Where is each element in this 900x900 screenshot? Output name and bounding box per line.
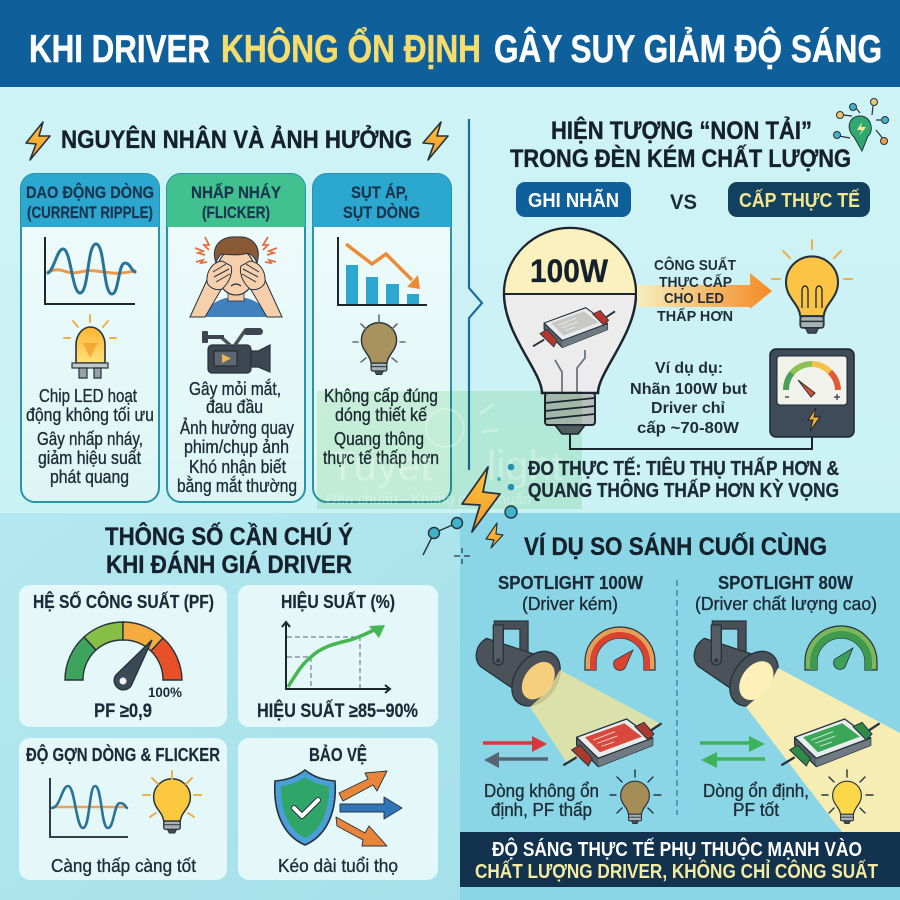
icon: LED chip	[64, 315, 116, 378]
text: real power lower: CÔNG SUẤT	[654, 256, 736, 274]
wire from bulb to meter	[570, 432, 812, 449]
watermark: Tuyet	[330, 442, 432, 489]
panel: voltage and current drop: Không cấp đúng	[324, 386, 438, 406]
current arrows unstable	[483, 736, 548, 768]
title banner	[0, 0, 900, 87]
text: real power lower: THỰC CẤP	[659, 274, 732, 291]
text: example: Ví dụ dụ:	[655, 360, 723, 377]
heading: under-load phenomenon: TRONG ĐÈN KÉM CHẤT LƯỢNG	[510, 144, 851, 173]
heading: final comparison: VÍ DỤ SO SÁNH CUỐI CÙNG	[524, 531, 827, 561]
driver red	[563, 719, 662, 767]
big 100W bulb	[504, 228, 636, 434]
spotlight with bright lens	[694, 625, 788, 715]
panel: flicker: Khó nhận biết	[189, 457, 286, 477]
panel: current ripple: DAO ĐỘNG DÒNG	[26, 183, 154, 202]
card: ripple and flicker	[19, 738, 227, 880]
text: example	[630, 360, 748, 437]
VS text: VS	[670, 191, 697, 214]
text: real power lower: THẤP HƠN	[657, 308, 733, 325]
efficiency curve chart	[282, 622, 390, 693]
title banner: KHÔNG ỔN ĐỊNH	[221, 26, 481, 71]
icon: driver inside bulb	[533, 308, 615, 347]
panel: flicker: Ảnh hưởng quay	[180, 417, 294, 438]
heading: parameters: THÔNG SỐ CẦN CHÚ Ý	[105, 521, 353, 551]
icon: person covering eyes	[190, 237, 282, 317]
green gauge	[805, 626, 877, 670]
panel: spotlight 80W: SPOTLIGHT 80W	[718, 573, 853, 593]
icon: power meter	[770, 349, 854, 437]
heading: causes and effects: NGUYÊN NHÂN VÀ ẢNH HƯỞNG	[61, 124, 412, 154]
actual supply pill	[728, 182, 870, 217]
text: real power lower: CHO LED	[664, 290, 724, 307]
gauge	[65, 622, 182, 690]
label pill: GHI NHÃN	[528, 189, 619, 212]
panel: spotlight 100W: Dòng không ổn	[484, 781, 599, 801]
panel: flicker: bằng mắt thường	[177, 475, 297, 496]
panel: flicker: NHẤP NHÁY	[191, 183, 282, 202]
watermark	[317, 391, 582, 509]
big 100W bulb: 100W	[530, 253, 609, 289]
current arrows stable	[700, 736, 765, 768]
panel: current ripple	[21, 174, 159, 502]
label pill	[516, 182, 631, 217]
watermark: Đèn chuẩn - Không gian chuẩn	[326, 491, 531, 508]
card: power factor: 100%	[148, 684, 183, 700]
card: protection: Kéo dài tuổi thọ	[278, 856, 398, 876]
panel: current ripple: (CURRENT RIPPLE)	[27, 203, 153, 222]
card: efficiency: HIỆU SUẤT ≥85−90%	[257, 700, 418, 722]
small ripple chart	[50, 778, 128, 837]
icon: bright bulb small	[822, 770, 873, 824]
section divider with notch	[469, 119, 482, 470]
icon: dim bulb small	[610, 770, 661, 824]
panel: voltage and current drop: Quang thông	[334, 429, 424, 449]
panel: spotlight 100W	[476, 573, 662, 824]
bullet list: real measurement: ĐO THỰC TẾ: TIÊU THỤ THẤP HƠN &	[528, 456, 839, 480]
heading: under-load phenomenon	[510, 115, 851, 173]
panel: flicker	[167, 174, 305, 502]
heading: parameters	[105, 521, 353, 579]
text: example: Driver chỉ	[651, 400, 726, 417]
falling bar chart	[338, 237, 427, 305]
arrows	[336, 771, 402, 846]
panel: spotlight 80W: (Driver chất lượng cao)	[695, 594, 877, 614]
watermark: light	[487, 442, 563, 489]
panel: voltage and current drop: SỤT ÁP,	[351, 183, 408, 202]
heading: parameters: KHI ĐÁNH GIÁ DRIVER	[106, 550, 352, 579]
heading: under-load phenomenon: HIỆN TƯỢNG “NON TẢI”	[551, 115, 812, 145]
card: efficiency	[238, 585, 438, 727]
panel: voltage and current drop	[313, 174, 451, 502]
panel: current ripple: phát quang	[50, 467, 129, 487]
lower-right background	[460, 513, 900, 900]
text: example: Nhãn 100W but	[630, 381, 748, 398]
card: power factor	[19, 585, 227, 727]
panel: spotlight 100W: (Driver kém)	[522, 594, 618, 614]
panel: spotlight 100W: SPOTLIGHT 100W	[498, 573, 643, 593]
icon: shield	[275, 770, 335, 845]
text: example: cấp ~70-80W	[637, 420, 740, 437]
card: protection: BẢO VỆ	[309, 744, 367, 765]
panel: current ripple: giảm hiệu suất	[38, 448, 141, 468]
icon: central lightning and nodes	[423, 467, 517, 564]
spotlight with dim lens	[476, 625, 570, 715]
panel: flicker: đau đầu	[206, 397, 263, 417]
panel: flicker: Gây mỏi mắt,	[189, 378, 281, 399]
text: real power lower	[654, 256, 736, 325]
panel: spotlight 80W: PF tốt	[733, 800, 779, 820]
red gauge	[585, 627, 655, 670]
card: protection	[238, 738, 438, 880]
icon: yellow bulb	[772, 240, 852, 333]
panel: spotlight 80W: Dòng ổn định,	[703, 781, 809, 801]
bright beam	[746, 668, 900, 832]
ripple chart	[45, 237, 135, 304]
driver green	[781, 719, 880, 767]
heading: causes and effects	[26, 122, 448, 160]
card: power factor: HỆ SỐ CÔNG SUẤT (PF)	[33, 591, 214, 612]
card: efficiency: HIỆU SUẤT (%)	[281, 591, 395, 612]
lower-left background	[0, 513, 460, 900]
icon: bright bulb	[143, 771, 201, 833]
card: ripple and flicker: Càng thấp càng tốt	[51, 856, 196, 876]
panel: current ripple: Chip LED hoạt	[39, 386, 137, 406]
panel: flicker: phim/chụp ảnh	[184, 437, 289, 457]
icon: video camera	[202, 328, 270, 373]
card: power factor: PF ≥0,9	[94, 701, 152, 722]
bullet list: real measurement: QUANG THÔNG THẤP HƠN KỲ VỌNG	[528, 478, 839, 502]
title banner: KHI DRIVER	[29, 28, 210, 71]
conclusion banner	[460, 832, 900, 887]
weak beam	[530, 670, 662, 763]
panel: spotlight 80W	[694, 573, 900, 832]
panel: voltage and current drop: SỤT DÒNG	[343, 203, 420, 222]
panel: voltage and current drop: dóng thiết kế	[335, 405, 427, 425]
icon: dim bulb	[353, 315, 405, 375]
bullet list: real measurement	[508, 456, 839, 502]
panel: voltage and current drop: thực tế thấp hơn	[323, 448, 439, 468]
panel: spotlight 100W: định, PF thấp	[491, 800, 592, 820]
actual supply pill: CẤP THỰC TẾ	[739, 189, 860, 212]
icon: idea network	[834, 98, 888, 151]
comparison divider	[676, 580, 678, 815]
panel: current ripple: động không tối ưu	[26, 405, 154, 425]
arrow: real power to LED	[637, 273, 772, 309]
card: ripple and flicker: ĐỘ GỢN DÒNG & FLICKER	[26, 744, 220, 765]
panel: flicker: (FLICKER)	[202, 203, 270, 222]
panel: current ripple: Gây nhấp nháy,	[37, 429, 143, 449]
